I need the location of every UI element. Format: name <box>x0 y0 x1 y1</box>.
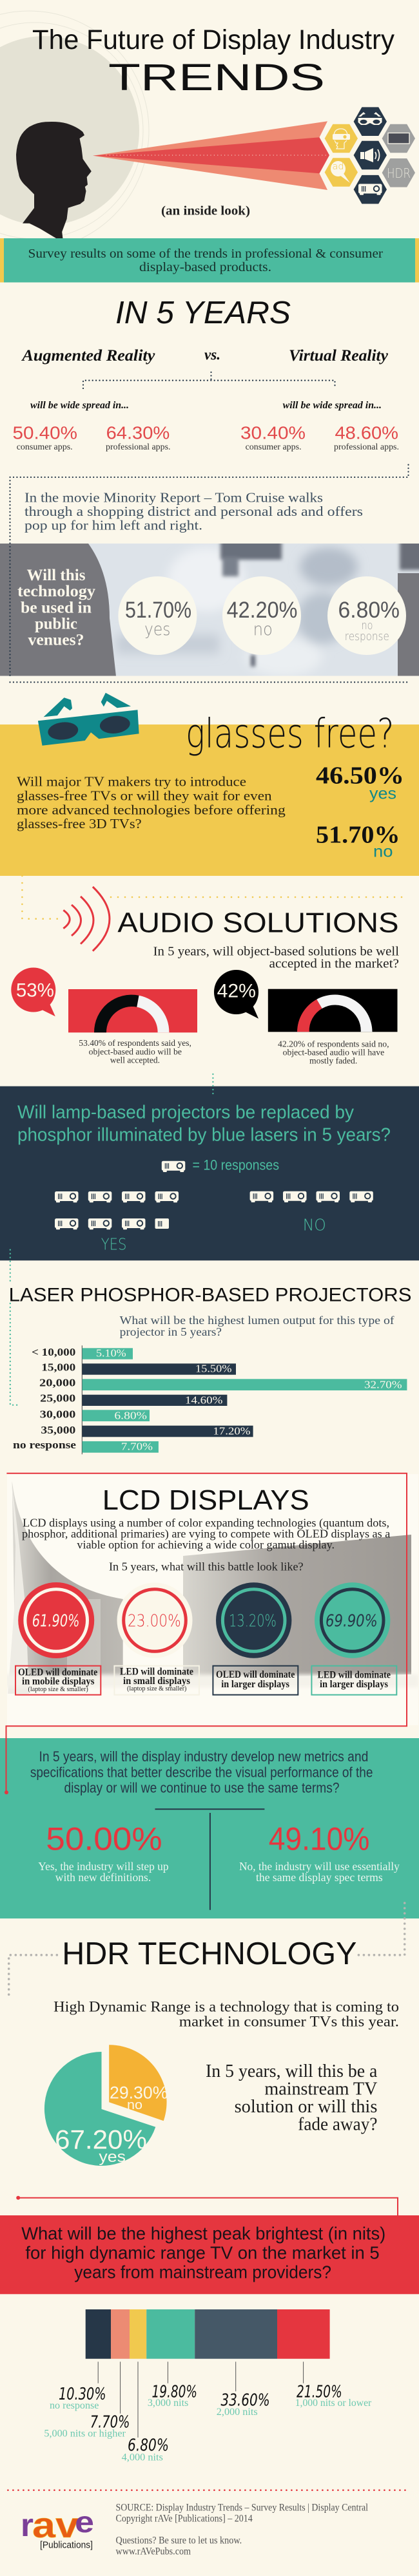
value: 1000 nits: 1,000 nits or lower <box>295 2398 372 2409</box>
question text: be used in <box>21 600 92 617</box>
percentages: 30.40% <box>240 423 306 443</box>
stat: no: no <box>253 620 273 639</box>
label box: OLED mobile <box>15 1666 101 1695</box>
icon: 3D glasses hexagon <box>354 107 387 136</box>
stat: no <box>222 576 301 655</box>
stat: no response: no <box>361 619 373 632</box>
question text: Will lamp-based projectors be replaced by <box>17 1103 354 1123</box>
body text: through a shopping district and personal ads and offers <box>24 504 363 519</box>
percentage captions: consumer apps. <box>17 442 73 452</box>
stat: no: 49.10% <box>269 1821 369 1857</box>
stat: no: the same display spec terms <box>256 1871 383 1884</box>
stat: yes: 51.70% <box>125 598 191 623</box>
stacked bar chart <box>44 2309 372 2463</box>
panel: peak brightness question <box>0 2196 419 2294</box>
label box: OLED larger <box>213 1666 298 1695</box>
logo: r <box>21 2507 34 2543</box>
panel: footer <box>8 2490 407 2557</box>
bubble: 42 percent <box>214 970 258 1019</box>
bar chart: < 10,000 <box>32 1346 75 1358</box>
value: 1000 nits <box>295 2382 372 2409</box>
bar chart: 25,000 <box>40 1392 75 1405</box>
body text: pop up for him left and right. <box>24 518 202 533</box>
percentages <box>13 423 398 443</box>
icon: projector hexagon <box>354 175 387 204</box>
stat circle: OLED larger <box>216 1582 291 1658</box>
percentage captions: professional apps. <box>334 442 399 452</box>
value: 1000 nits: 21.50% <box>297 2382 342 2401</box>
icon: head silhouette <box>16 122 92 238</box>
dotted connector <box>22 876 403 919</box>
caption: no: mostly faded. <box>309 1057 357 1066</box>
question text: glasses-free 3D TVs? <box>17 816 142 831</box>
question text: more advanced technologies before offering <box>17 802 286 817</box>
question text: Will this <box>27 567 86 584</box>
legend: = 10 responses <box>192 1157 279 1173</box>
question text: In 5 years, will the display industry develop new metrics and <box>39 1748 368 1765</box>
dotted frame <box>10 465 409 682</box>
value: 2000 nits: 33.60% <box>220 2391 270 2410</box>
logo: av <box>32 2505 79 2545</box>
caption: yes: well accepted. <box>110 1056 160 1066</box>
title line 1: The Future of Display Industry <box>32 24 395 55</box>
beam: inner <box>93 137 329 173</box>
spread labels <box>30 400 382 411</box>
question text: Will major TV makers try to introduce <box>17 774 246 790</box>
value: 3000 nits: 19.80% <box>152 2382 197 2401</box>
question text: years from mainstream providers? <box>74 2262 331 2282</box>
label box: LED small: LED will dominate <box>120 1667 193 1678</box>
bar chart: 35,000 <box>41 1424 75 1436</box>
stat: yes <box>118 576 197 655</box>
label box: OLED mobile: in mobile displays <box>22 1676 94 1687</box>
heading: LCD DISPLAYS <box>102 1484 309 1516</box>
icon: sound waves <box>63 887 110 951</box>
question: accepted in the market? <box>269 957 399 971</box>
stat: no: no <box>373 843 393 861</box>
bar chart: 30,000 <box>40 1408 75 1421</box>
value: 2000 nits <box>217 2391 270 2418</box>
label box: LED small <box>114 1666 199 1695</box>
value: 4000 nits <box>122 2436 169 2463</box>
value: 5000 nits: 7.70% <box>90 2412 130 2432</box>
heading: AUDIO SOLUTIONS <box>117 907 399 938</box>
question text: public <box>35 616 77 632</box>
label box: OLED mobile: (laptop size & smaller) <box>28 1686 88 1693</box>
red frame <box>6 1473 407 1792</box>
gauge: no <box>268 989 397 1032</box>
stat: yes: 50.00% <box>46 1821 162 1857</box>
question text: In 5 years, will this be a <box>206 2061 378 2081</box>
panel: metrics question <box>0 1738 419 1918</box>
panel: audio solutions <box>11 876 403 1066</box>
stat: no response: response <box>345 630 389 643</box>
panel: lamp vs laser question <box>0 1074 419 1260</box>
question text: specifications that better describe the visual performance of the <box>30 1764 373 1780</box>
bar chart: 20,000 <box>39 1376 75 1388</box>
question text: glasses-free TVs or will they wait for even <box>17 788 272 804</box>
pictogram: yes <box>55 1191 179 1254</box>
icon: ad bubble hexagon: ad <box>333 162 344 172</box>
question text: display or will we continue to use the same terms? <box>64 1779 339 1795</box>
description: LCD displays using a number of color expanding technologies (quantum dots, <box>23 1517 389 1530</box>
pie chart: 67.20% <box>55 2125 147 2155</box>
question: In 5 years, will object-based solutions be well <box>153 944 399 958</box>
label box: LED larger <box>311 1666 396 1695</box>
panel: glasses free <box>0 693 419 876</box>
bar chart: 5.10% <box>96 1347 126 1359</box>
bar chart: 32.70% <box>364 1378 402 1390</box>
intro text: High Dynamic Range is a technology that is coming to <box>54 1998 399 2014</box>
stat: no response <box>327 576 406 655</box>
stat circle: OLED mobile <box>18 1582 94 1658</box>
stat circle: OLED larger: 13.20% <box>229 1611 277 1631</box>
augmented reality label: Augmented Reality <box>21 347 155 365</box>
stat: yes: yes <box>144 620 170 639</box>
pictogram: no <box>250 1191 373 1235</box>
question text: venues? <box>28 632 84 649</box>
spread labels: will be wide spread in... <box>30 400 129 411</box>
value: no response: no response <box>50 2400 99 2411</box>
source text: SOURCE: Display Industry Trends – Survey Results | Display Central <box>116 2502 368 2513</box>
photo backdrop <box>0 1474 419 1726</box>
beam: outer <box>93 121 327 190</box>
gauge: yes <box>68 989 197 1032</box>
photo backdrop <box>0 538 419 676</box>
body text: In the movie Minority Report – Tom Cruise walks <box>24 489 323 505</box>
value: no response <box>50 2385 106 2411</box>
label box: LED small: in small displays <box>123 1676 190 1687</box>
panel: laser phosphor projectors <box>9 1250 411 1454</box>
bar chart: 17.20% <box>213 1425 251 1437</box>
stat: no: No, the industry will use essentially <box>239 1860 400 1873</box>
bubble: 53 percent <box>11 967 55 1016</box>
panel: HDR technology <box>9 1903 405 2166</box>
source text: Questions? Be sure to let us know. <box>116 2535 242 2546</box>
percentage captions: professional apps. <box>106 442 170 452</box>
stat: yes: Yes, the industry will step up <box>38 1860 169 1873</box>
value: 3000 nits: 3,000 nits <box>148 2398 188 2409</box>
panel: header <box>0 11 415 251</box>
icon: speaker hexagon <box>354 141 387 169</box>
bubble: 53 percent: 53% <box>16 980 54 1001</box>
question text: mainstream TV <box>264 2079 377 2099</box>
heading: IN 5 YEARS <box>115 296 291 330</box>
subtitle: (an inside look) <box>161 204 250 218</box>
value: 4000 nits: 6.80% <box>128 2436 169 2456</box>
pie chart: yes <box>99 2148 126 2166</box>
bar chart: 6.80% <box>114 1409 147 1421</box>
stat: no: 42.20% <box>227 598 297 623</box>
intro text: Survey results on some of the trends in professional & consumer <box>28 247 383 261</box>
dotted connector <box>83 372 335 388</box>
percentages: 50.40% <box>13 423 77 443</box>
question text: technology <box>17 583 96 600</box>
icon: 3D glasses <box>38 693 139 746</box>
panel: survey intro band <box>0 238 419 282</box>
spread labels: will be wide spread in... <box>283 400 382 411</box>
intro text: market in consumer TVs this year. <box>179 2014 399 2030</box>
caption: no: object-based audio will have <box>283 1048 384 1058</box>
label box: LED small: (laptop size & smaller) <box>127 1685 187 1692</box>
bar chart: 14.60% <box>185 1394 223 1406</box>
stat: yes <box>316 762 404 803</box>
bar chart: no response <box>13 1439 77 1451</box>
virtual reality label: Virtual Reality <box>289 347 389 365</box>
stat: no: 51.70% <box>316 821 400 848</box>
value: 2000 nits: 2,000 nits <box>217 2407 258 2418</box>
vs label: vs. <box>204 347 220 364</box>
percentages: 48.60% <box>335 423 398 443</box>
question text: solution or will this <box>235 2097 377 2117</box>
description: viable option for achieving a wide color gamut display. <box>77 1538 335 1551</box>
icon: ad bubble hexagon <box>325 158 358 187</box>
question text: phosphor illuminated by blue lasers in 5 years? <box>17 1125 391 1146</box>
icon: HDR hexagon: HDR <box>387 166 411 181</box>
label box: OLED larger: in larger displays <box>221 1679 289 1690</box>
description: phosphor, additional primaries) are vying to compete with OLED displays as a <box>22 1527 390 1540</box>
heading: HDR TECHNOLOGY <box>62 1937 356 1971</box>
question: projector in 5 years? <box>120 1325 222 1338</box>
panel: minority report <box>0 465 419 682</box>
pictogram: yes: YES <box>101 1235 126 1254</box>
stat: yes: with new definitions. <box>55 1871 151 1884</box>
question: In 5 years, what will this battle look like? <box>109 1560 304 1573</box>
panel: LCD displays <box>5 1472 418 1738</box>
stat: no <box>316 821 400 861</box>
label box: OLED mobile: OLED will dominate <box>18 1667 97 1678</box>
caption: no: 42.20% of respondents said no, <box>278 1039 389 1049</box>
bar chart: 7.70% <box>121 1441 153 1453</box>
stat circle: LED larger <box>315 1582 390 1658</box>
pie chart: no <box>127 2098 142 2112</box>
legend <box>162 1157 279 1173</box>
value: 4000 nits: 4,000 nits <box>122 2452 163 2463</box>
stat: no <box>239 1821 400 1884</box>
value: 3000 nits <box>148 2382 197 2409</box>
caption: yes: 53.40% of respondents said yes, <box>79 1039 191 1048</box>
percentages: 64.30% <box>106 423 170 443</box>
backdrop circles <box>0 11 149 251</box>
value: 5000 nits <box>44 2412 130 2439</box>
source text: www.rAVePubs.com <box>116 2546 191 2557</box>
label box: LED larger: in larger displays <box>320 1679 388 1690</box>
pie chart <box>44 2045 168 2166</box>
stat circle: LED small <box>117 1583 192 1658</box>
label box: OLED larger: OLED will dominate <box>216 1669 295 1680</box>
stat: no response: 6.80% <box>338 598 400 623</box>
question text: What will be the highest peak brightest (in nits) <box>21 2223 385 2243</box>
title line 2: TRENDS <box>108 57 325 99</box>
label box: LED larger: LED will dominate <box>317 1669 391 1680</box>
stat: yes <box>38 1821 169 1884</box>
pictogram: no: NO <box>303 1216 326 1235</box>
question text: for high dynamic range TV on the market in 5 <box>25 2242 380 2262</box>
bar chart <box>13 1345 407 1454</box>
source text: Copyright rAVe [Publications] – 2014 <box>116 2514 253 2524</box>
stat circle: LED small: 23.00% <box>128 1611 181 1631</box>
bar chart: 15,000 <box>41 1361 75 1373</box>
icon: HDR hexagon <box>382 158 415 187</box>
bubble: 42 percent: 42% <box>217 980 256 1001</box>
value: no response: 10.30% <box>59 2385 106 2404</box>
percentage captions <box>17 442 399 452</box>
question: What will be the highest lumen output for this type of <box>120 1314 394 1327</box>
icon: virtual reality hexagon <box>325 124 358 153</box>
panel: in 5 years AR vs VR <box>13 296 399 452</box>
logo: e <box>75 2505 94 2539</box>
caption: yes: object-based audio will be <box>89 1047 182 1057</box>
stat: yes: yes <box>369 785 396 803</box>
logo <box>21 2505 94 2551</box>
logo: [Publications] <box>40 2540 93 2551</box>
icon: tv hexagon <box>382 124 415 153</box>
bar chart: 15.50% <box>195 1363 232 1375</box>
value: 5000 nits: 5,000 nits or higher <box>44 2428 126 2439</box>
percentage captions: consumer apps. <box>246 442 302 452</box>
stat: yes: 46.50% <box>316 762 404 790</box>
pie chart: 29.30% <box>110 2083 168 2102</box>
question text: fade away? <box>298 2114 377 2134</box>
stat circle: OLED mobile: 61.90% <box>32 1611 79 1631</box>
intro text: display-based products. <box>139 260 271 274</box>
stat circle: LED larger: 69.90% <box>326 1611 378 1631</box>
heading: LASER PHOSPHOR-BASED PROJECTORS <box>9 1285 411 1306</box>
